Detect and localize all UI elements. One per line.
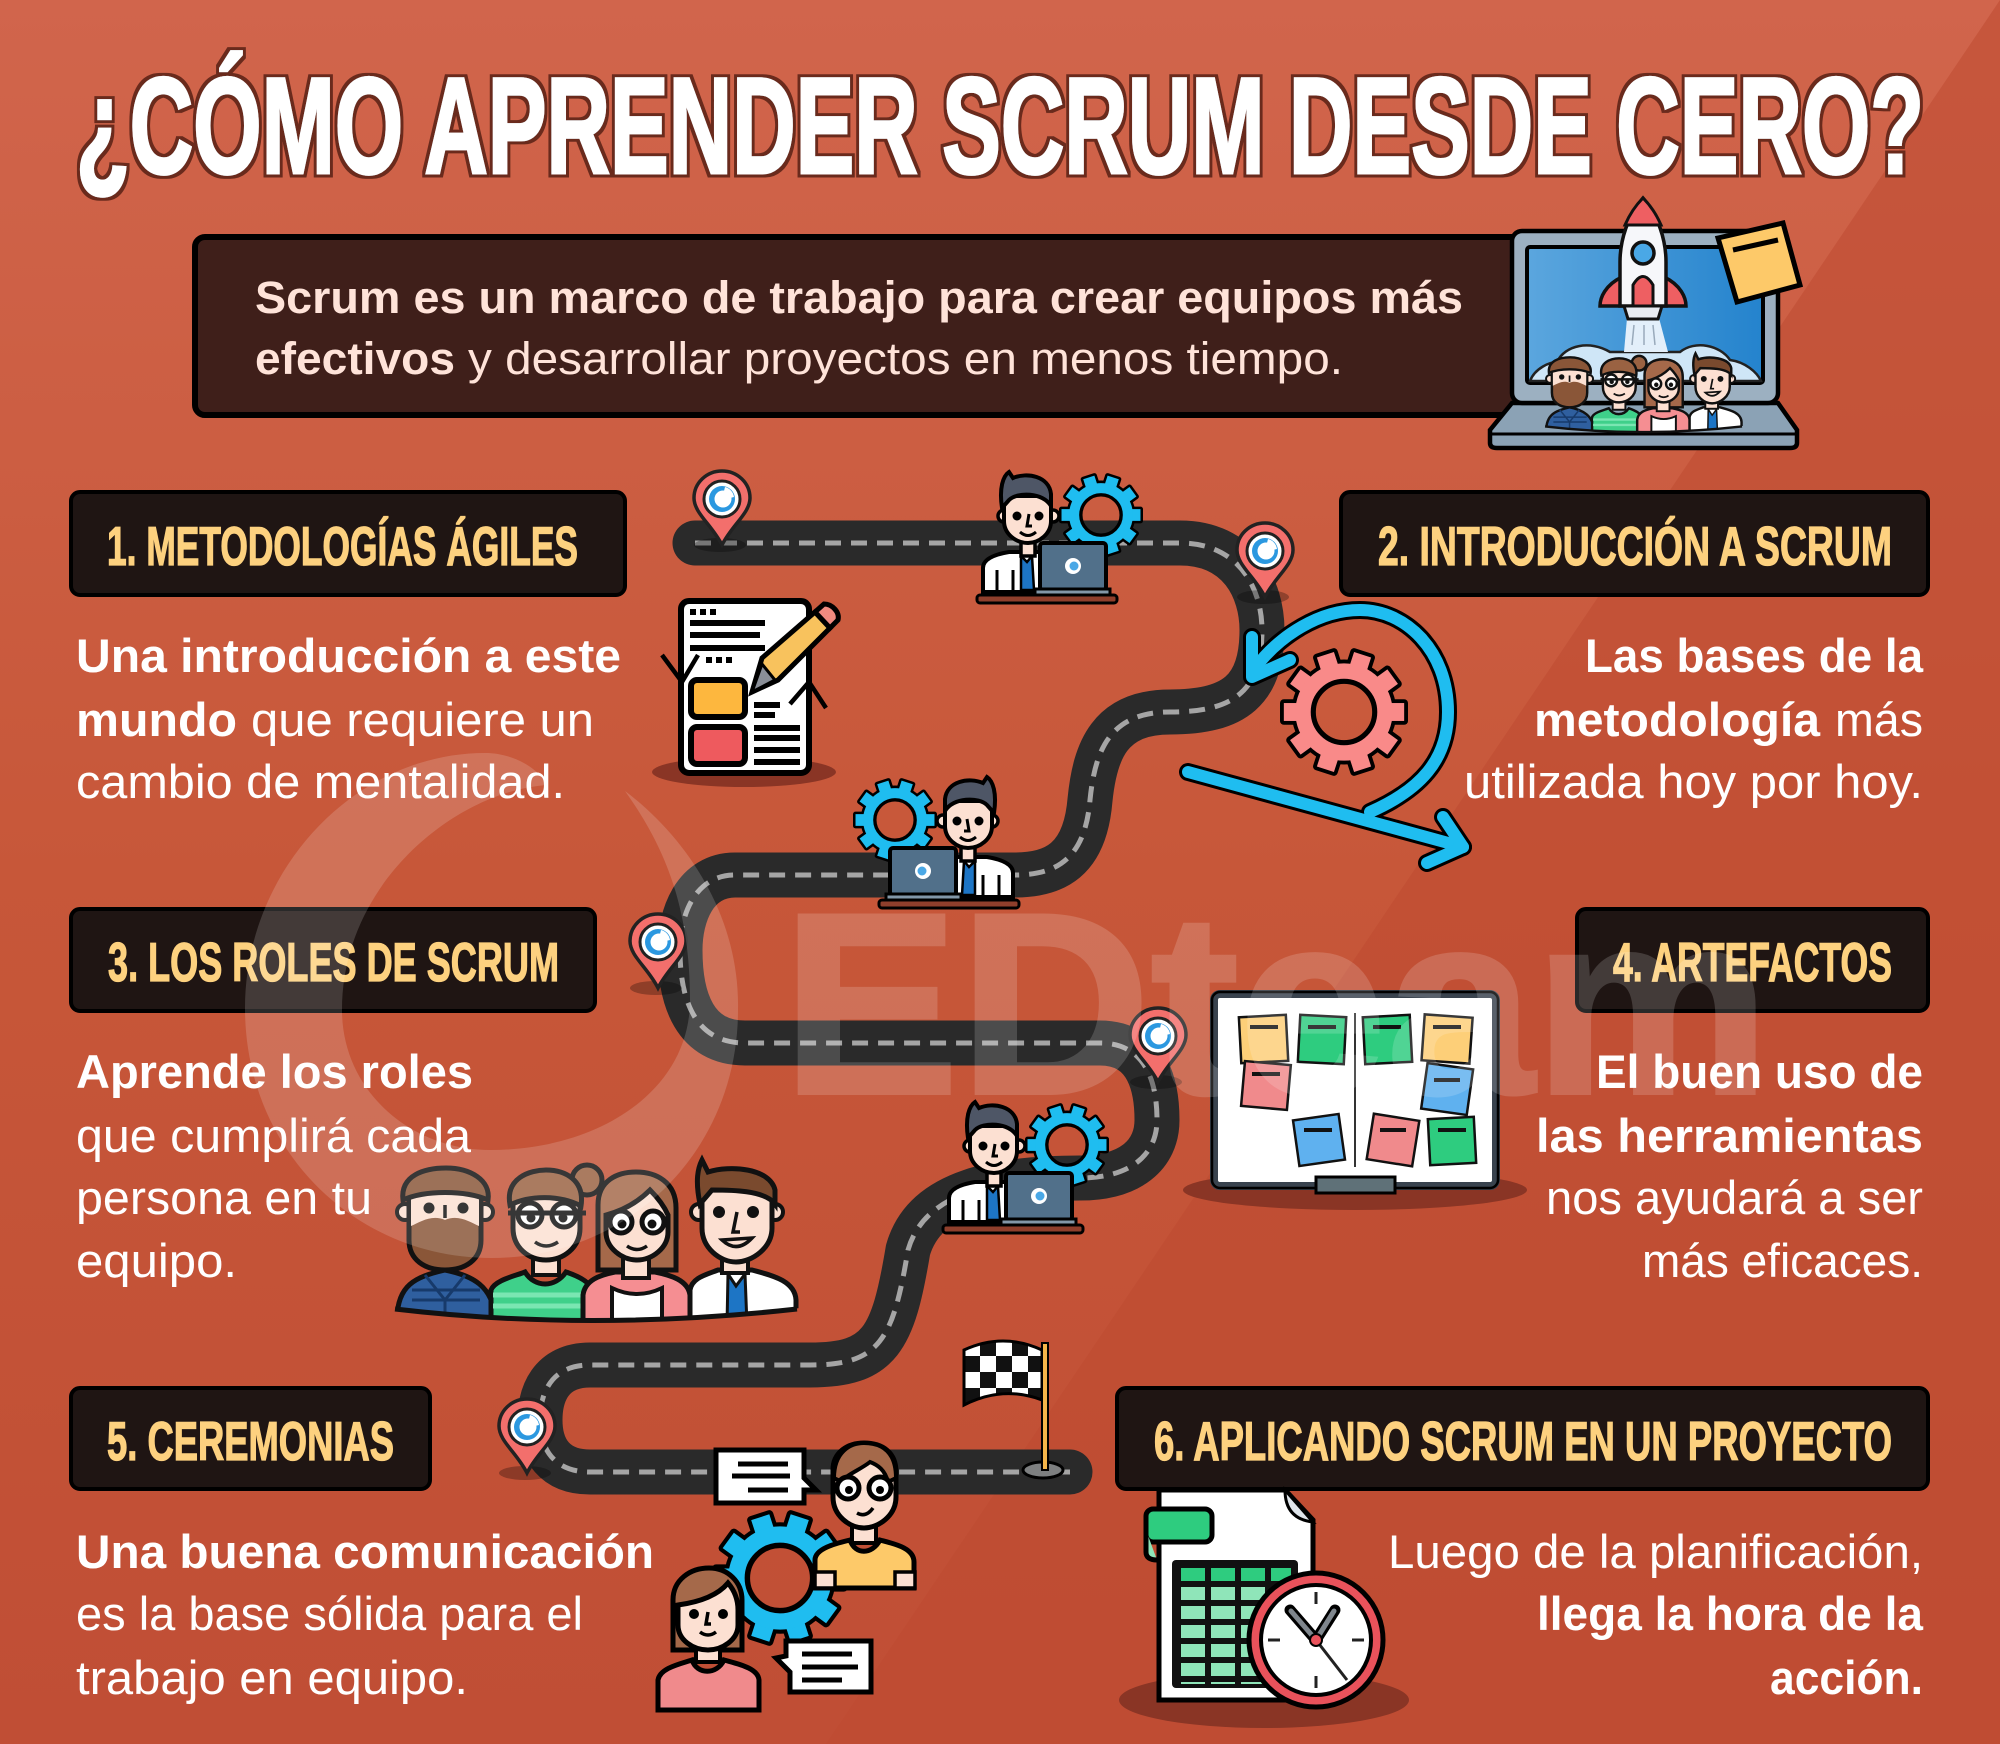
text block 4: El buen uso de <box>1596 1045 1923 1098</box>
icon: team of four <box>395 1160 797 1325</box>
text block 3 <box>76 1045 473 1287</box>
heading 5 <box>71 1388 430 1489</box>
text block 6 <box>1388 1525 1924 1704</box>
icon: laptop with rocket and team <box>1490 198 1800 448</box>
heading 6 <box>1117 1388 1928 1489</box>
icon: scrum board <box>1183 992 1527 1210</box>
text block 4: nos ayudará a ser <box>1546 1171 1923 1224</box>
icon: spreadsheet and clock <box>1119 1490 1409 1728</box>
heading 2 <box>1341 492 1928 595</box>
heading 3 <box>71 909 595 1011</box>
icon: pin 3 <box>630 914 686 995</box>
heading 3: 3. LOS ROLES DE SCRUM <box>108 931 559 993</box>
watermark: EDteam logo: EDteam <box>782 859 1770 1148</box>
heading 1 <box>71 492 625 595</box>
icon: team communication <box>658 1443 915 1710</box>
text block 4: más eficaces. <box>1642 1234 1923 1287</box>
icon: person at laptop lower <box>943 1102 1109 1233</box>
text block 5 <box>76 1525 654 1704</box>
text block 1 <box>76 629 621 808</box>
text block 2: más <box>1835 693 1923 746</box>
text block 6: acción. <box>1770 1651 1923 1704</box>
text block 2: Las bases de la <box>1585 629 1924 682</box>
icon: pin 4 <box>1130 1008 1186 1089</box>
road <box>540 543 1262 1472</box>
watermark: EDteam logo <box>245 753 1770 1258</box>
intro panel: Scrum es un marco de trabajo para crear equipos más <box>255 272 1463 323</box>
text block 1: cambio de mentalidad. <box>76 755 565 808</box>
text block 5: Una buena comunicación <box>76 1525 654 1578</box>
intro panel: efectivos <box>255 333 455 384</box>
text block 3: Aprende los roles <box>76 1045 473 1098</box>
icon: pin 5 <box>499 1399 555 1480</box>
text block 2: metodología <box>1534 693 1821 746</box>
text block 2: utilizada hoy por hoy. <box>1464 755 1923 808</box>
heading 4 <box>1577 909 1928 1011</box>
text block 3: que cumplirá cada <box>76 1109 472 1162</box>
heading 5: 5. CEREMONIAS <box>107 1410 394 1472</box>
icon: finish flag <box>964 1341 1063 1478</box>
intro panel: y desarrollar proyectos en menos tiempo. <box>468 333 1343 384</box>
icon: pin 2 <box>1237 523 1293 604</box>
icon: pin 1 <box>694 471 750 552</box>
text block 6: llega la hora de la <box>1537 1587 1924 1640</box>
text block 6: Luego de la planificación, <box>1388 1525 1923 1578</box>
icon: scrum loop with gear <box>1188 610 1463 863</box>
icon: document and pencil <box>652 601 838 787</box>
text block 5: trabajo en equipo. <box>76 1651 468 1704</box>
heading 1: 1. METODOLOGÍAS ÁGILES <box>107 515 578 577</box>
text block 1: Una introducción a este <box>76 629 621 682</box>
text block 3: persona en tu <box>76 1171 372 1224</box>
text block 5: es la base sólida para el <box>76 1587 583 1640</box>
text block 1: que requiere un <box>251 693 594 746</box>
intro panel <box>195 237 1525 415</box>
text block 2 <box>1464 629 1924 808</box>
text block 1: mundo <box>76 693 237 746</box>
text block 3: equipo. <box>76 1234 237 1287</box>
icon: person at laptop top <box>977 472 1143 603</box>
text block 4 <box>1536 1045 1923 1287</box>
text block 4: las herramientas <box>1536 1109 1923 1162</box>
icon: person at laptop middle <box>853 777 1019 908</box>
